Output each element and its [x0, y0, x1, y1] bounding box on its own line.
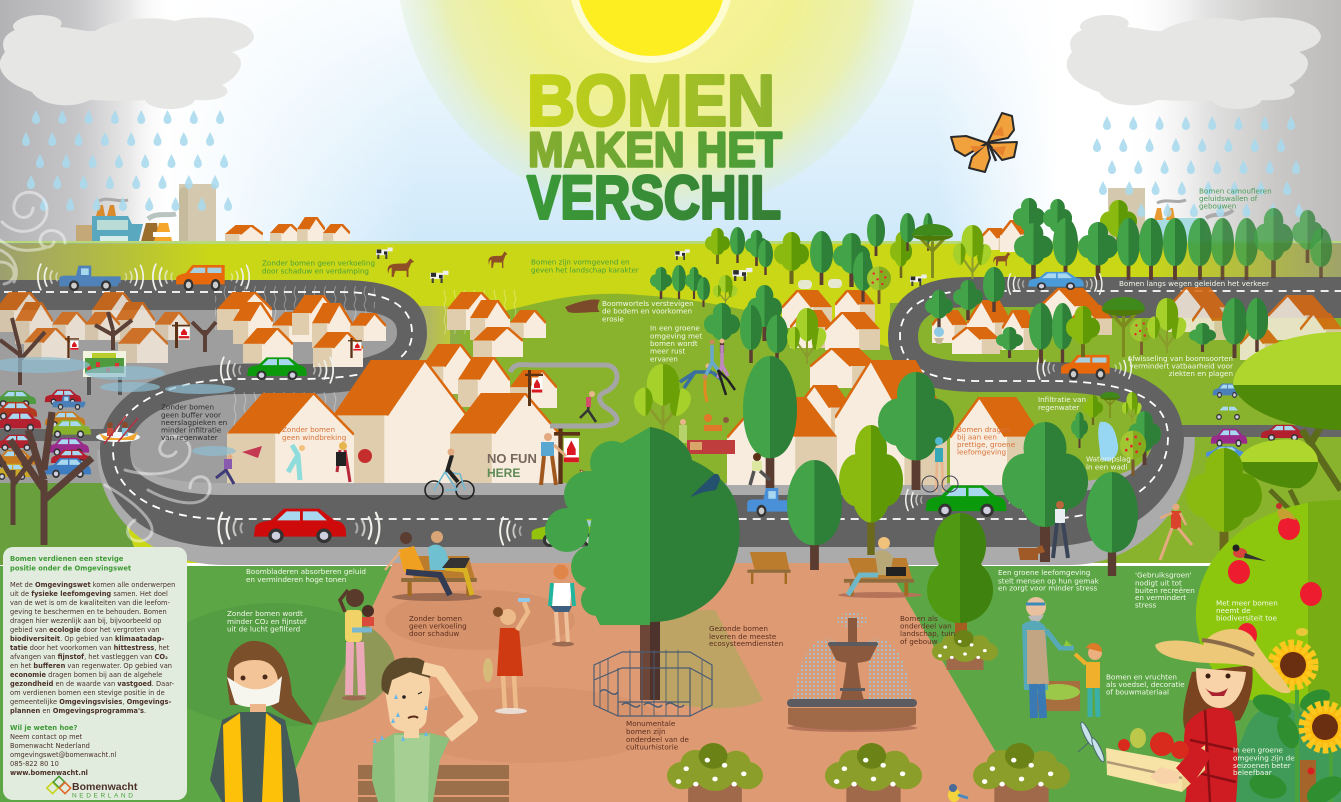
- caption: usable green: nodigt uit tot: [1135, 578, 1182, 588]
- caption: pleasant environment: [957, 425, 1016, 456]
- caption: ecosystem services: [709, 624, 783, 648]
- caption: ecosystem services: leveren de meeste: [709, 632, 777, 641]
- cloud right: [1067, 15, 1321, 109]
- panel contact: [10, 724, 117, 777]
- panel body text: en het bufferen van regenwater. Op gebied van: [10, 662, 172, 670]
- caption: usable green: 'Gebruiksgroen': [1135, 570, 1192, 580]
- caption: ecosystem services: Gezonde bomen: [709, 624, 768, 633]
- panel body text: Met de Omgevingswet komen alle onderwerpen: [10, 581, 175, 589]
- horizon houses right: [980, 220, 1036, 252]
- caption: particulates: uit de lucht gefilterd: [227, 624, 300, 634]
- caption: landscape garden: landschap, tuin: [900, 629, 955, 638]
- caption: seasons: In een groene: [1233, 746, 1283, 754]
- caption: leaves absorb sound: en verminderen hoge tonen: [246, 575, 346, 584]
- caption: pleasant environment: bij aan een: [957, 432, 997, 442]
- caption: pleasant environment: prettige, groene: [957, 440, 1016, 449]
- boy: [1075, 643, 1102, 717]
- caption: trees guide traffic: Bomen langs wegen geleiden het verkeer: [1119, 279, 1269, 288]
- panel body text: gebied van ecologie door het vergroten van: [10, 626, 159, 634]
- panel contact: Bomenwacht Nederland: [10, 742, 90, 750]
- caption: particulates: [227, 609, 307, 634]
- caption: stress: stelt mensen op hun gemak: [998, 576, 1100, 586]
- large tree upper right: [1233, 332, 1341, 490]
- caption: species variety: Afwisseling van boomsoorten: [1128, 354, 1233, 363]
- caption: usable green: stress: [1135, 600, 1157, 610]
- blue pickup centre right: [747, 488, 807, 517]
- caption: seasons: beleefbaar: [1233, 768, 1272, 777]
- billboard: [83, 351, 126, 395]
- caption: tree roots: [602, 299, 694, 324]
- factory left: [76, 184, 216, 245]
- caption: sound walls: [1199, 186, 1272, 210]
- panel heading: positie onder de Omgevingswet: [10, 564, 132, 572]
- gardener with seedling: [1022, 597, 1080, 718]
- Bomenwacht logo: NEDERLAND: [72, 792, 136, 800]
- empty bench behind tree: [747, 552, 791, 584]
- title: VERSCHIL: [527, 164, 781, 232]
- butterfly: [951, 113, 1017, 172]
- caption: water storage: [1086, 454, 1131, 472]
- panel body text: om verdienen bomen een stevige positie in de: [10, 689, 165, 697]
- caption: particulates: Zonder bomen wordt: [227, 609, 303, 618]
- caption: usable green: [1135, 570, 1195, 610]
- caption: fruit and material: of bouwmateriaal: [1106, 688, 1169, 696]
- panel heading: [10, 555, 132, 572]
- red car on main road: [219, 509, 379, 543]
- caption: sound walls: Bomen camoufleren: [1199, 186, 1272, 196]
- caption: tree roots: erosie: [602, 314, 624, 324]
- caption: rain buffer: geen buffer voor: [161, 410, 221, 420]
- caption: calm: ervaren: [650, 354, 678, 364]
- caption: water storage: Wateropslag: [1086, 454, 1131, 464]
- panel heading: Bomen verdienen een stevige: [10, 555, 124, 563]
- large house A: [227, 393, 354, 483]
- for sale signs: [65, 322, 580, 484]
- caption: no shade: geen verkoeling: [409, 622, 467, 630]
- caption: no shade: door schaduw: [409, 629, 459, 638]
- woman on phone: [550, 564, 574, 646]
- flower planters: [667, 743, 1070, 802]
- caption: monumental trees: cultuurhistorie: [626, 742, 679, 752]
- title: MAKEN HET: [528, 124, 782, 178]
- tree row and cluster right: [912, 198, 1332, 280]
- caption: biodiversity: biodiversiteit toe: [1216, 614, 1277, 622]
- panel contact: omgevingswet@bomenwacht.nl: [10, 751, 117, 759]
- background trees centre: [650, 213, 933, 307]
- caption: biodiversity: neemt de: [1216, 606, 1251, 615]
- caption: fruit and material: Bomen en vruchten: [1106, 672, 1177, 682]
- panel contact: 085-822 80 10: [10, 760, 59, 768]
- panel body text: geving te beschermen en te behouden. Bomen: [10, 608, 167, 616]
- caption: tree roots: Boomwortels verstevigen: [602, 299, 694, 308]
- people in park: [680, 338, 735, 402]
- central large tree: [545, 427, 763, 708]
- man by sign: [541, 433, 566, 485]
- Bomenwacht logo: Bomenwacht: [72, 781, 138, 793]
- bee: [1296, 628, 1308, 636]
- caption: no shade: Zonder bomen: [409, 614, 462, 623]
- caption: stress: en zorgt voor minder stress: [998, 584, 1098, 592]
- caption: cooling: Zonder bomen geen verkoeling: [262, 258, 375, 268]
- trees in right loop: [925, 267, 1268, 363]
- large house B: [333, 360, 468, 483]
- runner right: [1160, 504, 1192, 560]
- dragonfly: [1078, 721, 1106, 763]
- caption: landscape character: [531, 258, 639, 274]
- green car right of centre: [906, 485, 1025, 517]
- panel contact: www.bomenwacht.nl: [10, 769, 88, 777]
- houses inside right loop: [932, 288, 1112, 354]
- caption: rain buffer: neerslagpieken en: [161, 418, 227, 427]
- sunflowers and leafy hill: [1210, 645, 1341, 802]
- cars on upper road left: [38, 264, 249, 291]
- walkers in wind: [216, 442, 372, 484]
- blue tit: [948, 784, 968, 802]
- wadi trees and water storage: [1071, 392, 1161, 476]
- park path: [510, 365, 617, 426]
- bench with man on laptop: [838, 537, 922, 598]
- dog near for sale sign: [580, 470, 606, 482]
- panel contact: Neem contact op met: [10, 733, 83, 741]
- double lobed tree at plaza: [927, 513, 993, 640]
- farm animals: [376, 248, 1010, 289]
- caption: fruit and material: [1106, 672, 1185, 696]
- swallow bird: [690, 474, 720, 497]
- lime tree right: [1186, 448, 1262, 560]
- caption: landscape garden: onderdeel van: [900, 622, 952, 630]
- caption: pleasant environment: leefomgeving: [957, 448, 1006, 456]
- title: [527, 62, 782, 232]
- caption: species variety: [1128, 354, 1233, 378]
- cloud left: [0, 15, 254, 109]
- caption: monumental trees: onderdeel van de: [626, 735, 690, 744]
- caption: landscape garden: [900, 614, 955, 646]
- caption: seasons: [1233, 746, 1295, 777]
- blue car upper right road: [1008, 272, 1102, 294]
- caption: rain buffer: van regenwater: [161, 433, 218, 442]
- caption: landscape garden: of gebouw: [900, 637, 938, 646]
- panel contact: Wil je weten hoe?: [10, 724, 77, 732]
- caption: rain buffer: Zonder bomen: [161, 402, 214, 412]
- woman pouring water: [483, 598, 530, 714]
- horizon houses left: [225, 217, 350, 245]
- caption: calm: [650, 324, 702, 364]
- tree three-leaf in park: [634, 364, 691, 434]
- caption: wind: [282, 425, 346, 442]
- caption: leaves absorb sound: [246, 567, 366, 584]
- eroding tree root: [565, 300, 600, 313]
- panel body text: economie dragen bomen bij aan de algehele: [10, 671, 162, 679]
- flower bush: [932, 630, 998, 670]
- birds on apple tree: [1232, 503, 1296, 561]
- caption: calm: omgeving met: [650, 332, 702, 340]
- rain right: [1093, 116, 1303, 217]
- caption: usable green: buiten recreëren: [1135, 586, 1195, 595]
- factory right: [1108, 188, 1233, 248]
- houses centre left: [217, 292, 386, 367]
- caption: water storage: in een wadi: [1086, 462, 1127, 472]
- caption: species variety: ziekten en plagen: [1169, 369, 1233, 378]
- lime car behind tree: [500, 517, 635, 547]
- large house C: [450, 393, 560, 483]
- caption: wind: Zonder bomen: [282, 425, 335, 434]
- houses centre: [422, 292, 557, 408]
- caption: calm: In een groene: [650, 324, 700, 332]
- caption: usable green: en vermindert: [1135, 593, 1186, 602]
- woman with child: [340, 589, 374, 700]
- trees along street centre-right: [743, 356, 1138, 576]
- sun with halo: [396, 0, 918, 216]
- houses far right: [1168, 287, 1341, 360]
- parked cars left: [0, 390, 91, 480]
- title: BOMEN: [527, 62, 775, 142]
- caption: infiltration: [1038, 395, 1086, 412]
- kayakers in floodwater: [96, 416, 140, 444]
- caption: stress: [998, 568, 1100, 592]
- bench with couple: [385, 531, 482, 601]
- caption: pleasant environment: Bomen dragen: [957, 425, 1010, 434]
- caption: monumental trees: [626, 719, 690, 752]
- caption: leaves absorb sound: Boombladeren absorberen geluid: [246, 567, 366, 576]
- panel body text: uit de fysieke leefomgeving samen. Het doel: [10, 590, 168, 598]
- medium tree right: [1238, 439, 1318, 520]
- caption: landscape character: geven het landschap karakter: [531, 266, 639, 274]
- bare trees: [0, 312, 216, 385]
- sweating man and bench: [358, 658, 509, 802]
- runner near house: [750, 453, 770, 485]
- panel body text: van de wet is om de kwaliteiten van die leefom-: [10, 599, 170, 607]
- puddles: [0, 357, 236, 456]
- green car on second road: [221, 357, 333, 383]
- caption: fruit and material: als voedsel, decoratie: [1106, 680, 1185, 689]
- mask woman: [210, 641, 313, 802]
- fountain: [787, 613, 917, 732]
- panel body text: dragen hier wezenlijk aan bij, bijvoorbeeld op: [10, 617, 162, 625]
- parked cars right: [1206, 384, 1305, 459]
- hat girl with fruit crate: [1106, 629, 1291, 802]
- caption: seasons: omgeving zijn de: [1233, 754, 1295, 762]
- caption: rain buffer: minder infiltratie: [161, 426, 222, 434]
- caption: biodiversity: [1216, 598, 1278, 622]
- bare trees foreground left: [0, 412, 92, 545]
- caption: monumental trees: Monumentale: [626, 719, 676, 728]
- panel body text: afvangen van fijnstof, het vastleggen van CO₂: [10, 653, 168, 661]
- jogger on park path: [580, 391, 596, 422]
- caption: calm: bomen wordt: [650, 339, 698, 348]
- caption: calm: meer rust: [650, 346, 685, 356]
- ground: fields: [0, 241, 1341, 565]
- caption: sound walls: gebouwen: [1199, 202, 1236, 210]
- plaza and lower green: [0, 563, 1341, 802]
- caption: tree roots: de bodem en voorkomen: [602, 306, 692, 316]
- caption: infiltration: Infiltratie van: [1038, 395, 1086, 404]
- wind swirls: [0, 192, 210, 541]
- mid trees centre: [704, 285, 826, 364]
- woman walking dog: [1018, 501, 1068, 560]
- caption: stress: Een groene leefomgeving: [998, 568, 1090, 577]
- panel body text: plannen en Omgevingsprogramma's.: [10, 707, 146, 715]
- caption: wind: geen windbreking: [282, 433, 346, 442]
- rain left: [22, 110, 232, 211]
- caption: species variety: vermindert vatbaarheid voor: [1129, 362, 1233, 370]
- iron fence around trunk: [594, 650, 712, 716]
- caption: landscape character: Bomen zijn vormgevend en: [531, 258, 630, 266]
- caption: no shade: [409, 614, 467, 638]
- heat haze over roofs: [215, 286, 520, 436]
- caption: cooling: door schaduw en verdamping: [262, 266, 369, 276]
- info panel: [3, 547, 187, 800]
- cyclist: [425, 448, 474, 499]
- panel body text: biodiversiteit. Op gebied van klimaatadap-: [10, 635, 164, 643]
- small fountain in loop: [934, 327, 944, 344]
- sky with storm gradients: [0, 0, 1341, 250]
- caption: particulates: minder CO₂ en fijnstof: [227, 617, 307, 626]
- graffiti NO FUN HERE: HERE: [487, 466, 520, 480]
- caption: ecosystem services: ecosysteemdiensten: [709, 639, 783, 648]
- orange jeep right loop: [1037, 355, 1131, 380]
- caption: landscape garden: Bomen als: [900, 614, 938, 623]
- Bomenwacht logo: [47, 776, 138, 800]
- picnic group: [679, 414, 735, 454]
- caption: biodiversity: Met meer bomen: [1216, 598, 1278, 608]
- caption: seasons: seizoenen beter: [1233, 761, 1291, 770]
- caption: rain buffer: [161, 402, 227, 442]
- panel body text: gezondheid en de waarde van vastgoed. Daar-: [10, 680, 175, 688]
- panel body text: tatie door het voorkomen van hittestress, het: [10, 644, 170, 652]
- caption: sound walls: geluidswallen of: [1199, 194, 1258, 203]
- roads: [0, 291, 1341, 565]
- houses left neighbourhood: [0, 292, 190, 363]
- panel body text: [10, 581, 175, 715]
- caption: monumental trees: bomen zijn: [626, 727, 666, 736]
- caption: cooling: [262, 258, 375, 276]
- houses right of centre: [727, 290, 947, 485]
- lime apple tree: [1196, 500, 1341, 712]
- graffiti NO FUN HERE: NO FUN: [487, 451, 537, 466]
- caption: infiltration: regenwater: [1038, 403, 1079, 412]
- cyclist woman right: [922, 437, 958, 492]
- house with caption right: [950, 397, 1042, 485]
- panel body text: gemeentelijke Omgevingsvisies, Omgevings-: [10, 698, 171, 706]
- graffiti NO FUN HERE: [487, 451, 537, 480]
